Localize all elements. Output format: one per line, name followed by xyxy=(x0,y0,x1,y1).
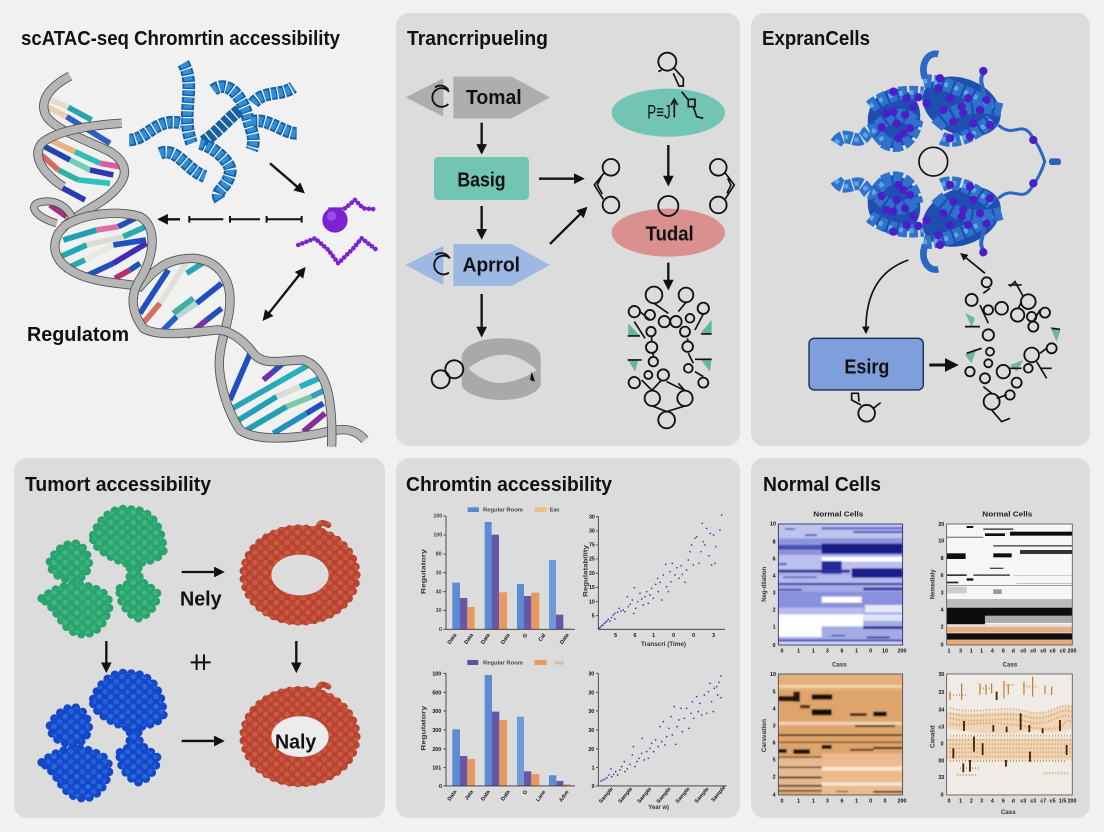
heatmap: gray xyxy=(929,510,1076,668)
heatmap: speckled: 0 xyxy=(941,793,944,799)
heatmap: blue: 1 xyxy=(797,649,800,655)
heatmap: orange: Carsvation xyxy=(761,719,768,752)
heatmap: speckled: 3 xyxy=(980,799,983,805)
heatmap: orange: 0 xyxy=(884,799,887,805)
heatmap: orange: 0 xyxy=(869,799,872,805)
bar chart: bottom: 300 xyxy=(432,709,441,715)
heatmap: orange: 3 xyxy=(773,723,776,729)
arrow xyxy=(478,123,485,153)
node: Tudal xyxy=(612,196,725,257)
icon: blue-purple protein complex xyxy=(836,54,1058,270)
node: Aprrol xyxy=(406,244,550,286)
heatmap: blue: 4 xyxy=(773,573,776,579)
arrow xyxy=(478,294,485,335)
heatmap: speckled: 0 xyxy=(941,741,944,747)
scatter plot: top: 3 xyxy=(712,633,715,639)
icon: gray ring xyxy=(432,338,541,400)
node: Basig xyxy=(434,157,529,200)
heatmap: gray: Normal Cells xyxy=(982,510,1032,519)
heatmap: gray: Cass xyxy=(1003,661,1018,668)
curved arrow xyxy=(866,260,908,333)
heatmap: speckled: c5 xyxy=(1050,799,1056,805)
icon: red ring protein xyxy=(243,523,357,622)
heatmap: orange: 1 xyxy=(855,799,858,805)
icon: blue protein xyxy=(42,673,163,798)
heatmap: blue: 10 xyxy=(770,522,776,528)
bar chart: bottom: Regulatory xyxy=(421,705,428,751)
scatter plot: top: 20 xyxy=(589,571,595,577)
icon: red ring protein with label xyxy=(243,685,357,783)
DNA double helix xyxy=(34,76,365,447)
node: Basig: Basig xyxy=(457,170,506,192)
scatter plot: top: Regulatability xyxy=(583,545,590,597)
heatmap: blue: 3 xyxy=(826,649,829,655)
scatter plot: top: Transcri (Time) xyxy=(641,641,686,648)
node: teal ellipse with symbols xyxy=(612,53,725,137)
bar chart: top: Data xyxy=(500,633,512,646)
heatmap: speckled: 33 xyxy=(938,775,944,781)
heatmap: gray: 200 xyxy=(1068,649,1076,655)
bar chart: bottom: 101 xyxy=(432,766,441,772)
heatmap: blue: Neg-dilation xyxy=(761,567,768,602)
scatter plot: bottom: Sample xyxy=(694,786,711,805)
scatter plot: bottom: 30 xyxy=(588,671,594,677)
arrow xyxy=(665,145,672,184)
heatmap: blue: 0 xyxy=(781,649,784,655)
heatmap: blue: 2 xyxy=(773,607,776,613)
icon: molecular network xyxy=(965,277,1061,422)
heatmap: orange: 3 xyxy=(826,799,829,805)
icon: molecular network xyxy=(628,287,712,428)
heatmap: gray: 6 xyxy=(941,573,944,579)
heatmap: gray: c0 xyxy=(1030,649,1036,655)
heatmap: speckled: c3 xyxy=(1020,799,1026,805)
heatmap: speckled: Canalid xyxy=(929,725,936,748)
scatter plot: bottom: Sample xyxy=(598,786,615,805)
heatmap: speckled: 34 xyxy=(938,707,944,713)
bar chart: bottom: Jata xyxy=(464,789,475,802)
heatmap: gray: 8 xyxy=(941,556,944,562)
heading: ExpranCells xyxy=(762,28,870,50)
scatter plot: bottom: Sample xyxy=(710,785,727,803)
bar chart: bottom xyxy=(421,660,575,803)
heatmap: blue: 1 xyxy=(855,649,858,655)
bar chart: top: Ean xyxy=(550,508,559,514)
scatter plot: top: 1 xyxy=(652,633,655,639)
heatmap: speckled: 1/5 xyxy=(1059,799,1066,805)
node: Tomal: Tomal xyxy=(466,87,522,109)
node: Tomal xyxy=(406,77,550,118)
scatter plot: top: 75 xyxy=(589,543,595,549)
heatmap: gray: 3 xyxy=(959,649,962,655)
scatter plot: bottom: Year w) xyxy=(648,804,669,811)
icon: left molecule xyxy=(594,159,619,213)
scatter plot: bottom: 30 xyxy=(588,728,594,734)
heatmap: gray: 20 xyxy=(938,522,944,528)
bar chart: bottom: Data xyxy=(447,789,458,802)
heatmap: blue: 0 xyxy=(869,649,872,655)
heatmap: blue: Normal Cells xyxy=(813,510,863,519)
heatmap: orange: 6 xyxy=(841,799,844,805)
bar chart: top: 30 xyxy=(436,608,442,614)
bar chart: top: Data xyxy=(480,633,492,646)
arrow xyxy=(103,641,110,671)
bar chart: top: Data xyxy=(447,633,458,646)
heatmap: gray: 4 xyxy=(941,607,944,613)
heatmap: speckled: 2 xyxy=(970,799,973,805)
heatmap: gray: c0 xyxy=(1020,649,1026,655)
bar chart: bottom: Data xyxy=(500,789,512,802)
scatter plot: top: 0 xyxy=(692,633,695,639)
heatmap: orange: 5 xyxy=(773,758,776,764)
scatter plot: top: 5 xyxy=(614,633,617,639)
heatmap: gray: 3 xyxy=(941,590,944,596)
bar chart: top: Cal xyxy=(538,632,548,643)
panel: scATAC-seq chromatin accessibility xyxy=(21,28,377,447)
scatter plot: bottom: Sample xyxy=(656,786,673,805)
heatmap: speckled: 200 xyxy=(1068,799,1076,805)
arrow xyxy=(293,641,300,671)
bar chart: top: 100 xyxy=(433,514,442,520)
bar chart: top: Data xyxy=(559,633,571,646)
heatmap: orange: 10 xyxy=(770,672,776,678)
heatmap: gray: 10 xyxy=(938,539,944,545)
heading: Tumort accessibility xyxy=(25,474,212,496)
scatter plot: top: 30 xyxy=(589,514,595,520)
arrow xyxy=(665,263,672,288)
heatmap: speckled: c3 xyxy=(1030,799,1036,805)
heatmap: orange: 5 xyxy=(773,689,776,695)
panel: Normal Cells heatmaps xyxy=(751,458,1090,818)
node: teal ellipse with symbols: P≡J xyxy=(647,102,671,123)
heatmap: gray: 1 xyxy=(947,649,950,655)
heading: Trancrripueling xyxy=(407,28,548,50)
heatmap: gray: c0 xyxy=(1040,649,1046,655)
heatmap: orange: 4 xyxy=(773,706,776,712)
symbol: not equal xyxy=(191,654,211,670)
scatter plot: top: 5 xyxy=(592,613,595,619)
arrow xyxy=(182,737,223,744)
heatmap: speckled: 0 xyxy=(947,799,950,805)
arrow xyxy=(478,206,485,238)
heatmap: blue: 200 xyxy=(898,649,906,655)
scatter plot: bottom: Sample xyxy=(675,786,692,805)
scatter plot: bottom: Sample xyxy=(636,786,653,805)
icon: purple ligand xyxy=(298,200,377,263)
label: Regulatom: Regulatom xyxy=(27,324,129,346)
bar chart: bottom: 500 xyxy=(432,690,441,696)
heatmap: gray: d xyxy=(1012,649,1015,655)
heatmap: gray: 4 xyxy=(991,649,994,655)
regulation arrows xyxy=(159,163,304,319)
heatmap: orange: 200 xyxy=(898,799,906,805)
node: Tudal: Tudal xyxy=(646,224,694,246)
heatmap: gray: c0 xyxy=(1050,649,1056,655)
heatmap: blue: 1 xyxy=(812,649,815,655)
heatmap: speckled: 1 xyxy=(959,799,962,805)
heading: Chromtin accessibility xyxy=(406,474,613,496)
heatmap: gray: c0 xyxy=(1060,649,1066,655)
scatter plot: top: 6 xyxy=(633,633,636,639)
bar chart: bottom: Lane xyxy=(535,789,547,803)
heatmap: gray: 1 xyxy=(980,649,983,655)
heatmap: gray: 2 xyxy=(941,624,944,630)
bar chart: bottom: 0 xyxy=(439,784,442,790)
scatter plot: bottom: 0 xyxy=(592,784,595,790)
heatmap: blue: 10 xyxy=(882,649,888,655)
bar chart: top: Data xyxy=(463,633,475,646)
heading: Normal Cells xyxy=(763,474,881,496)
bar chart: bottom: 300 xyxy=(432,728,441,734)
arrows to molecule xyxy=(539,179,586,244)
heatmap: speckled: 33 xyxy=(938,690,944,696)
scatter plot: bottom: Sample xyxy=(617,786,634,805)
heatmap: orange: 0 xyxy=(781,799,784,805)
scatter plot: top: 10 xyxy=(589,599,595,605)
arrow xyxy=(182,568,223,575)
bar chart: top: 40 xyxy=(436,589,442,595)
bar chart: top xyxy=(421,507,575,646)
heatmap: speckled: c7 xyxy=(1040,799,1046,805)
heatmap: orange xyxy=(761,672,906,805)
panel: ExpranCells xyxy=(751,13,1090,446)
heatmap: speckled: d xyxy=(1012,799,1015,805)
heatmap: orange: 1 xyxy=(812,799,815,805)
bar chart: bottom: Hal xyxy=(555,661,564,667)
bar chart: bottom: 100 xyxy=(432,671,441,677)
heatmap: speckled: 30 xyxy=(938,672,944,678)
scatter plot: bottom: 1 xyxy=(592,766,595,772)
heatmap: blue: 6 xyxy=(841,649,844,655)
heatmap: orange: 6 xyxy=(773,741,776,747)
bar chart: bottom: Adve xyxy=(558,789,571,803)
node: Esirg: Esirg xyxy=(844,356,889,378)
node: Esirg xyxy=(809,338,923,390)
icon: blue helical protein xyxy=(129,63,297,200)
heatmap: blue: 3 xyxy=(773,590,776,596)
heatmap: blue: Cass xyxy=(832,661,847,668)
arrow xyxy=(929,360,956,369)
scatter plot: top: 30 xyxy=(589,529,595,535)
scatter plot: top: 25 xyxy=(589,557,595,563)
icon: green protein xyxy=(42,509,163,634)
heatmap: orange: 2 xyxy=(773,775,776,781)
arrow to complex xyxy=(961,254,985,273)
bar chart: bottom: Regular Room xyxy=(483,661,523,667)
heatmap: blue: 0 xyxy=(773,643,776,649)
heatmap: gray: 1 xyxy=(970,649,973,655)
heatmap: gray: 0 xyxy=(941,643,944,649)
scatter plot: bottom: 30 xyxy=(588,690,594,696)
bar chart: bottom: 200 xyxy=(432,747,441,753)
bar chart: top: 0 xyxy=(439,627,442,633)
heatmap: orange: 4 xyxy=(773,793,776,799)
icon: small molecule xyxy=(852,393,881,422)
bar chart: top: 80 xyxy=(436,552,442,558)
heatmap: blue: 1 xyxy=(773,624,776,630)
heatmap: orange: 1 xyxy=(797,799,800,805)
scatter plot: bottom: 30 xyxy=(588,709,594,715)
heatmap: blue: 6 xyxy=(773,556,776,562)
scatter plot: top xyxy=(583,514,725,648)
heatmap: speckled: 00 xyxy=(938,758,944,764)
scatter plot: top: 0 xyxy=(672,633,675,639)
heatmap: speckled: c3 xyxy=(938,724,944,730)
scatter plot: bottom: 20 xyxy=(588,747,594,753)
scatter plot: bottom xyxy=(588,671,727,811)
bar chart: bottom: G xyxy=(522,789,529,796)
label: Nely: Nely xyxy=(180,589,222,611)
bar chart: top: 100 xyxy=(433,533,442,539)
bar chart: top: G xyxy=(522,633,529,640)
bar chart: bottom: Data xyxy=(480,789,492,802)
heatmap: speckled: 4 xyxy=(991,799,994,805)
scatter plot: top: 15 xyxy=(589,585,595,591)
panel: Chromtin accessibility charts xyxy=(396,458,740,818)
node: Aprrol: Aprrol xyxy=(463,255,520,277)
bar chart: top: 30 xyxy=(436,570,442,576)
heatmap: gray: Nemedialy xyxy=(929,569,936,599)
icon: red ring protein with label: Naly xyxy=(275,731,316,753)
heatmap: speckled xyxy=(929,672,1076,816)
bar chart: top: Regular Room xyxy=(483,508,523,514)
bar chart: top: Regulatory xyxy=(421,549,428,594)
heatmap: gray: 6 xyxy=(1002,649,1005,655)
panel: Trancrripueling flow xyxy=(396,13,740,446)
title: scATAC-seq Chromrtin accessibility xyxy=(21,28,341,50)
heatmap: blue: 8 xyxy=(773,539,776,545)
icon: right molecule xyxy=(710,159,734,213)
heatmap: blue xyxy=(761,510,906,668)
heatmap: speckled: 6 xyxy=(1002,799,1005,805)
panel: Tumort accessibility xyxy=(14,458,385,818)
heatmap: speckled: Cass xyxy=(1001,809,1016,816)
